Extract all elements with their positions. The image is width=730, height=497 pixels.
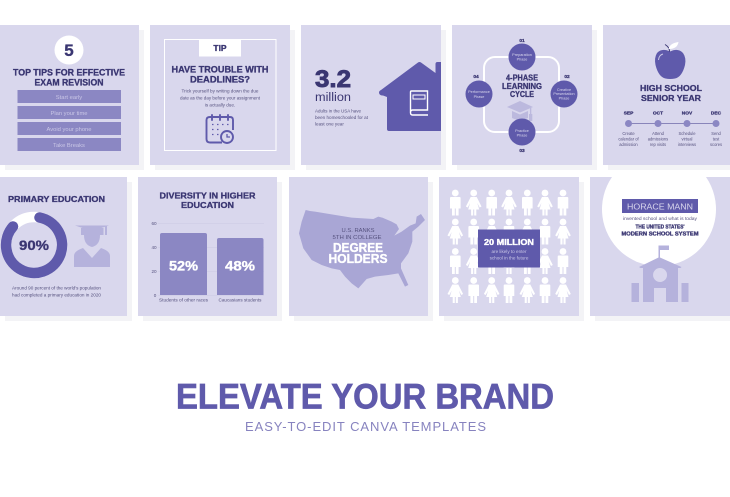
phase 1: 01 <box>519 38 525 44</box>
heading: 4-PHASE <box>506 74 538 82</box>
panel: homeschooled stat <box>301 25 446 170</box>
map label <box>328 228 388 266</box>
panel: deadlines tip <box>150 25 295 170</box>
timeline: rep visits <box>650 142 666 147</box>
name banner <box>622 199 698 213</box>
phase 2 <box>550 74 578 108</box>
number badge: 5 <box>64 41 74 60</box>
callout: school in the future <box>490 256 529 260</box>
heading: DIVERSITY IN HIGHER <box>160 190 256 200</box>
bar chart: 52% <box>169 258 198 274</box>
caption: had completed a primary education in 2020 <box>12 292 101 298</box>
heading: CYCLE <box>510 90 534 99</box>
panel: Horace Mann <box>590 177 730 321</box>
map: United States <box>299 210 425 288</box>
heading <box>622 224 698 238</box>
timeline: DEC <box>711 110 722 116</box>
pictogram <box>448 190 571 303</box>
body text: is actually due. <box>205 102 235 108</box>
timeline: Send <box>711 131 722 136</box>
timeline: Schedule <box>678 131 696 136</box>
panel: learning cycle <box>452 25 597 170</box>
heading: SENIOR YEAR <box>641 94 701 103</box>
icon: calendar <box>206 115 233 143</box>
donut chart: 90% <box>19 238 49 253</box>
panel: diversity bar chart <box>138 177 282 321</box>
phase 3 <box>508 118 536 154</box>
timeline: scores <box>710 142 722 147</box>
panel: 20 million people <box>439 177 584 321</box>
timeline <box>618 110 722 147</box>
phase 4: Phase <box>474 95 484 99</box>
phase 1 <box>508 38 536 70</box>
callout: are likely to enter <box>492 249 527 254</box>
timeline: interviews <box>678 142 696 147</box>
unit label: million <box>315 92 351 104</box>
tip list: Start early <box>56 95 82 101</box>
map label: HOLDERS <box>328 252 388 266</box>
description: invented school and what is today <box>623 216 698 221</box>
phase 1: Phase <box>517 58 527 62</box>
heading: TOP TIPS FOR EFFECTIVE <box>13 68 125 78</box>
phase 4: 04 <box>473 74 479 80</box>
phase 4 <box>466 74 492 108</box>
panel: exam revision tips <box>0 25 144 170</box>
heading: LEARNING <box>502 82 542 91</box>
caption <box>12 286 101 298</box>
bar chart: 0 <box>154 293 157 298</box>
timeline: admission <box>619 142 638 147</box>
heading: MODERN SCHOOL SYSTEM <box>622 232 698 238</box>
map label: 5TH IN COLLEGE <box>332 235 382 241</box>
icon: graduate <box>74 226 110 267</box>
bar chart: Students of other races <box>159 298 209 302</box>
timeline: calendar of <box>618 136 639 142</box>
donut chart <box>6 217 62 273</box>
heading: EXAM REVISION <box>34 78 104 88</box>
big number: 3.2 <box>315 66 351 93</box>
phase 3: Practice <box>515 129 529 133</box>
cycle ring <box>484 57 559 132</box>
tip list: Take Breaks <box>53 143 85 149</box>
map label: U.S. RANKS <box>342 228 375 234</box>
number badge <box>54 36 84 64</box>
icon: school <box>632 246 688 302</box>
bar chart: 60 <box>151 221 157 226</box>
name banner: HORACE MANN <box>627 202 693 212</box>
callout <box>478 230 540 268</box>
caption: Around 90 percent of the world's population <box>12 286 101 290</box>
heading: THE UNITED STATES' <box>636 224 684 230</box>
heading: HAVE TROUBLE WITH <box>172 64 268 74</box>
icon: house with book <box>379 62 441 131</box>
phase 2: Phase <box>559 96 569 100</box>
tip list <box>18 90 121 151</box>
heading: HIGH SCHOOL <box>640 84 702 93</box>
map label: DEGREE <box>333 241 383 255</box>
heading <box>172 64 268 84</box>
heading <box>13 68 125 88</box>
timeline: admissions <box>648 136 668 142</box>
title: ELEVATE YOUR BRAND <box>176 378 554 416</box>
phase 2: 02 <box>564 74 570 80</box>
icon: graduation cap <box>507 101 533 121</box>
body text: date as the day before your assignment <box>180 96 261 100</box>
timeline: Create <box>622 131 635 136</box>
tip tag <box>199 39 241 56</box>
body text <box>180 88 261 108</box>
timeline: OCT <box>653 110 663 116</box>
heading <box>502 74 542 99</box>
phase 1: Preparation <box>512 53 532 57</box>
bar chart: 48% <box>225 258 255 274</box>
panel: primary education <box>0 177 132 321</box>
heading: DEADLINES? <box>190 74 250 84</box>
timeline: virtual <box>682 136 693 142</box>
timeline: Attend <box>652 131 665 136</box>
phase 2: Creative <box>557 88 571 92</box>
description <box>315 108 369 126</box>
bar chart: 20 <box>151 269 157 274</box>
bar chart <box>151 221 264 302</box>
phase 4: Performance <box>468 90 490 94</box>
heading: EDUCATION <box>181 200 234 210</box>
timeline: NOV <box>682 110 693 116</box>
tip tag: TIP <box>213 43 227 53</box>
phase 2: Presentation <box>553 92 575 96</box>
heading <box>640 84 702 103</box>
bar chart: 40 <box>151 245 157 250</box>
phase 3: Phase <box>517 134 527 138</box>
subtitle: EASY-TO-EDIT CANVA TEMPLATES <box>245 419 486 434</box>
white circle <box>602 177 716 266</box>
tip list: Avoid your phone <box>46 127 92 133</box>
description: been homeschooled for at <box>315 115 369 120</box>
heading <box>160 190 256 210</box>
callout: 20 MILLION <box>484 238 534 247</box>
body text: Trick yourself by writing down the due <box>182 88 259 94</box>
description: least one year <box>315 122 344 126</box>
panel: high school senior year <box>603 25 730 170</box>
tip list: Plan your time <box>50 111 88 117</box>
panel: degree holders map <box>289 177 433 321</box>
icon: apple <box>655 42 685 79</box>
phase 3: 03 <box>519 148 525 154</box>
description: Adults in the USA have <box>315 108 361 114</box>
bar chart: Caucasians students <box>218 298 262 302</box>
timeline: test <box>713 136 720 142</box>
timeline: SEP <box>624 110 634 116</box>
heading: PRIMARY EDUCATION <box>8 194 105 204</box>
